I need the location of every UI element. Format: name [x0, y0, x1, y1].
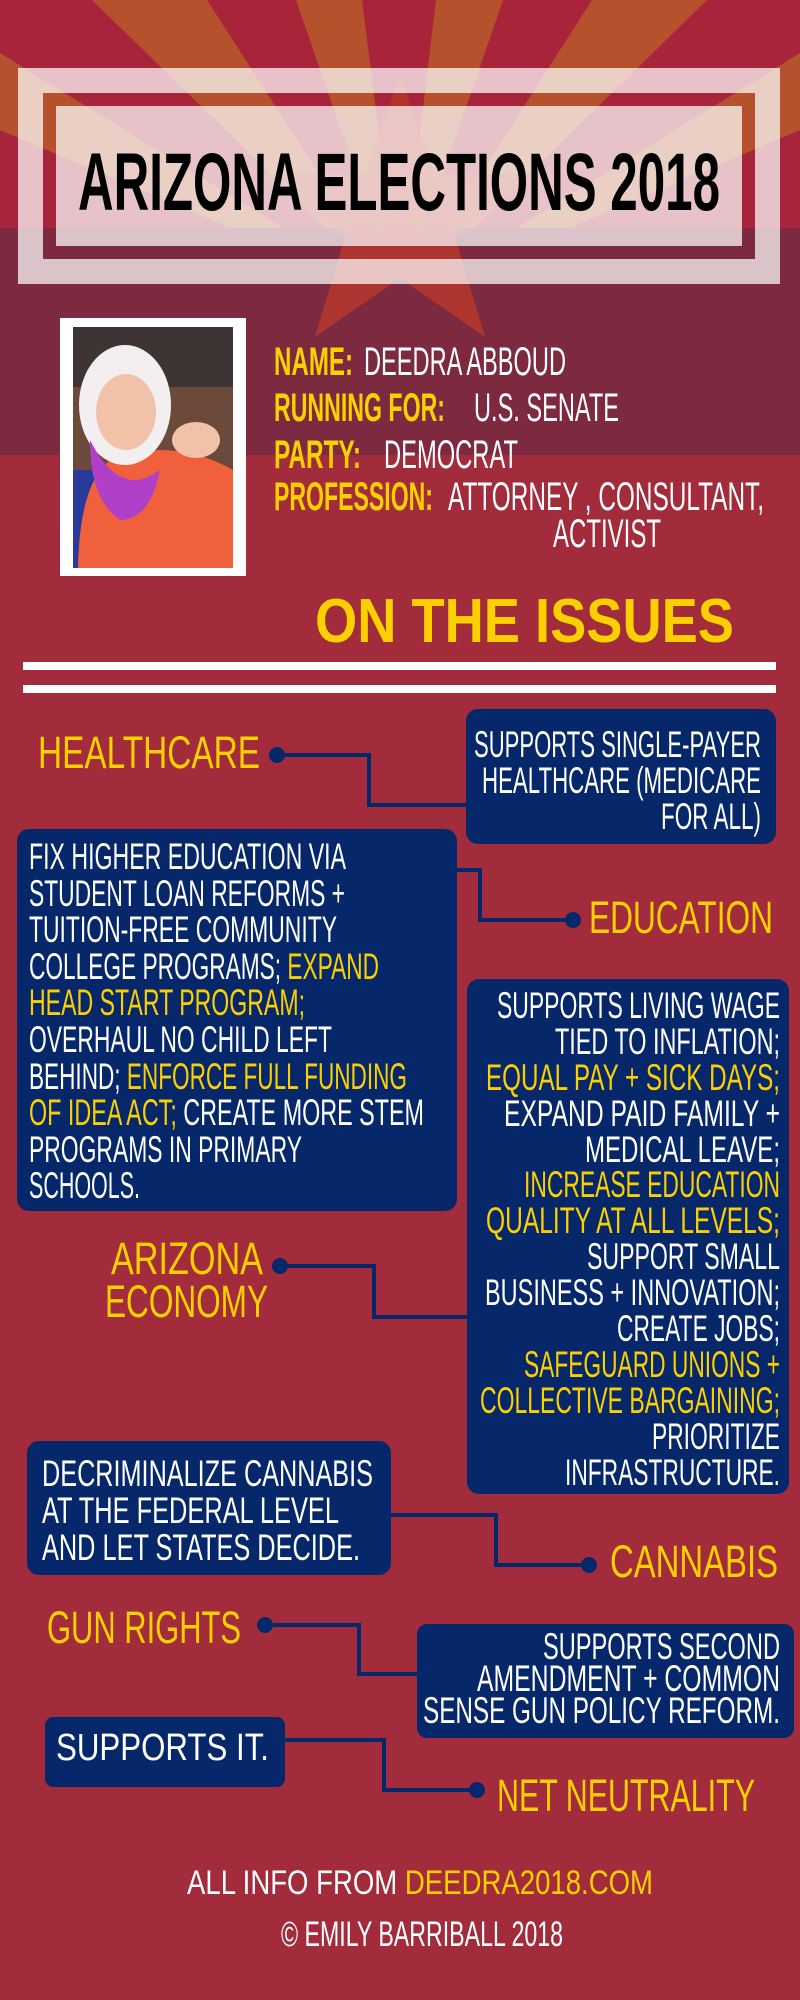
- issue: gun rights: [47, 1602, 794, 1738]
- issue: education: [17, 829, 773, 1211]
- issue: education: COLLEGE PROGRAMS; EXPAND: [29, 946, 379, 987]
- issue: education: OVERHAUL NO CHILD LEFT: [29, 1019, 332, 1060]
- issue: net neutrality: SUPPORTS IT.: [56, 1727, 269, 1769]
- issue: cannabis: DECRIMINALIZE CANNABIS: [42, 1453, 373, 1494]
- issue: cannabis: [27, 1441, 778, 1587]
- issue: education: FIX HIGHER EDUCATION VIA: [29, 836, 346, 877]
- candidate info: RUNNING FOR:: [274, 386, 445, 430]
- candidate info: [274, 340, 764, 556]
- issue: arizona economy: ECONOMY: [105, 1276, 268, 1327]
- issue: education: TUITION-FREE COMMUNITY: [29, 909, 337, 950]
- footer: ALL INFO FROM DEEDRA2018.COM: [187, 1864, 653, 1902]
- issue: education: OF IDEA ACT; CREATE MORE STEM: [29, 1092, 424, 1133]
- issue: education: BEHIND; ENFORCE FULL FUNDING: [29, 1056, 407, 1097]
- issue: gun rights: GUN RIGHTS: [47, 1602, 241, 1653]
- candidate info: DEMOCRAT: [384, 433, 518, 477]
- issue: arizona economy: ARIZONA: [111, 1233, 263, 1284]
- candidate info: PARTY:: [274, 433, 361, 477]
- title box: [18, 68, 780, 284]
- issue: arizona economy: [105, 979, 789, 1494]
- issue: education: PROGRAMS IN PRIMARY: [29, 1129, 302, 1170]
- candidate info: NAME:: [274, 340, 353, 384]
- issue: net neutrality: [45, 1717, 755, 1821]
- candidate info: PROFESSION:: [274, 475, 433, 519]
- candidate info: ACTIVIST: [553, 512, 661, 556]
- issue: cannabis: AND LET STATES DECIDE.: [42, 1527, 360, 1568]
- footer: [187, 1864, 653, 1954]
- icon: star: [262, 75, 538, 337]
- footer: © EMILY BARRIBALL 2018: [281, 1915, 563, 1954]
- photo: candidate portrait: [60, 318, 246, 576]
- issue: cannabis: AT THE FEDERAL LEVEL: [42, 1490, 339, 1531]
- candidate info: DEEDRA ABBOUD: [364, 340, 566, 384]
- issue: healthcare: [38, 709, 776, 844]
- issue: education: HEAD START PROGRAM;: [29, 982, 305, 1023]
- candidate info: U.S. SENATE: [474, 386, 619, 430]
- issue: healthcare: HEALTHCARE: [38, 727, 260, 778]
- issue: education: STUDENT LOAN REFORMS +: [29, 873, 345, 914]
- issue: education: SCHOOLS.: [29, 1165, 140, 1206]
- heading: on the issues: ON THE ISSUES: [315, 587, 734, 656]
